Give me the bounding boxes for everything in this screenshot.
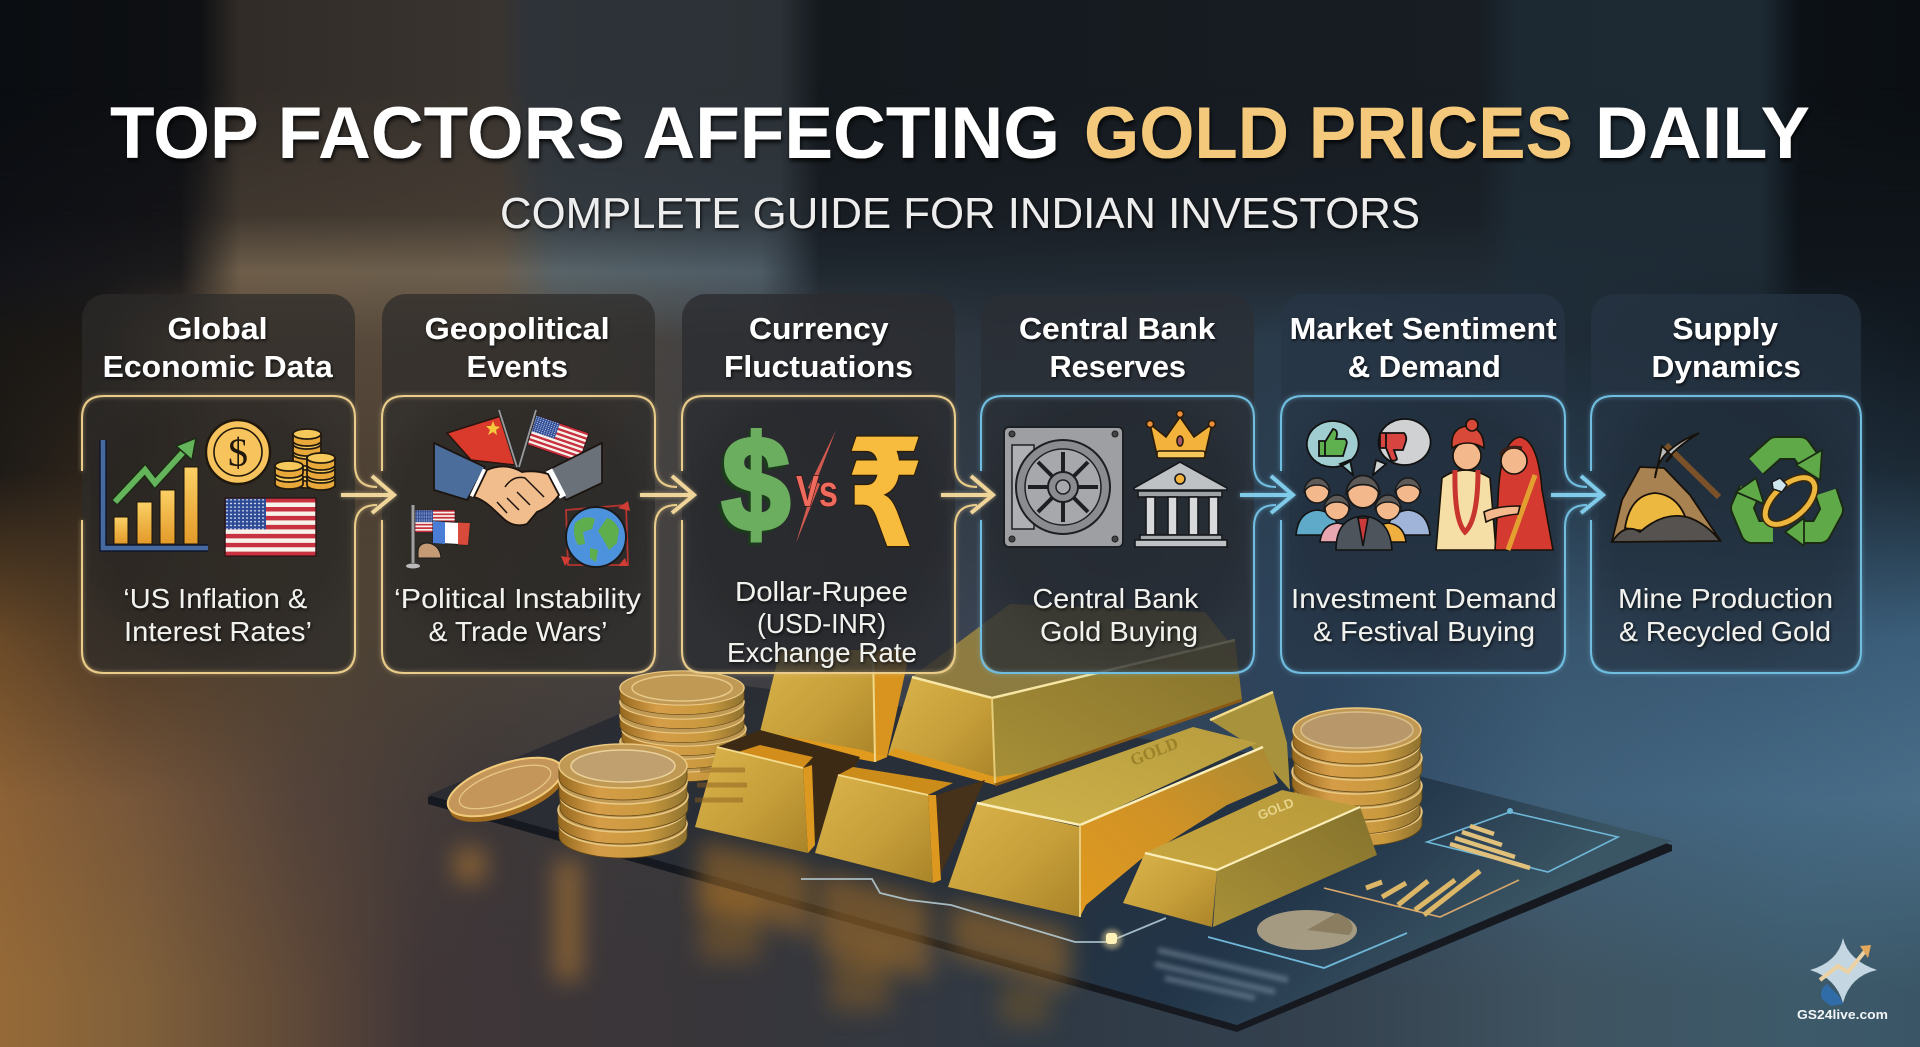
title [110,93,1810,174]
icon: wedding couple [1436,419,1553,550]
description [1291,583,1557,647]
icon: group of people [1296,476,1430,550]
panel: global economic data [82,294,377,673]
panel: geopolitical events [382,294,677,673]
right coin stack [1292,708,1422,846]
table reflections [455,848,1050,1025]
heading: Economic Data [103,349,333,384]
panel: currency fluctuations [682,294,977,673]
icon: dollar coin: $ [228,430,248,475]
panel: central bank reserves [981,294,1276,673]
icon: thumbs down bubble [1373,419,1431,475]
icon: versus mark: Vs [796,467,838,516]
tablet chart panel: bars [1427,808,1618,872]
tablet trend line [801,879,1166,949]
description: Exchange Rate [727,637,917,668]
gold bar front large: GOLD [1127,733,1181,770]
gold bar lower middle [815,767,985,883]
icon: handshake [434,443,602,525]
heading: Supply [1672,311,1779,346]
title: GOLD PRICES [1084,93,1573,174]
description: ‘Political Instability [394,583,641,614]
icon: China and US flags [447,410,589,467]
title: DAILY [1595,93,1810,174]
back coin stack [620,671,746,782]
gold bar back right [1210,692,1290,790]
gold bar front small: GOLD [1256,795,1296,823]
leaning coin [441,746,571,834]
heading [103,311,333,384]
description: ‘US Inflation & [123,583,308,614]
description: Investment Demand [1291,583,1557,614]
icon: thumbs up bubble [1307,421,1359,475]
panel: market sentiment and demand [1281,294,1587,673]
tablet chart panel: pie [1208,910,1407,968]
icon: recycling arrows with ring [1736,448,1832,546]
heading: Central Bank [1019,311,1216,346]
description: Interest Rates’ [124,616,312,647]
icon: rising bar chart [103,438,208,548]
icon: dollar coin [206,420,270,484]
gold bar front small [1123,790,1377,927]
heading [425,311,610,384]
description [394,583,641,647]
description: Dollar-Rupee [735,576,908,607]
gold bar back left [758,650,910,762]
arrow 1 [341,476,394,513]
icon: versus mark [796,430,838,543]
icon: crown [1146,410,1216,458]
description: (USD-INR) [757,608,886,639]
arrow 4 [1240,476,1293,513]
description: Gold Buying [1040,616,1198,647]
heading: Market Sentiment [1290,311,1557,346]
icon: globe [561,501,630,567]
heading: Events [466,349,568,384]
description [1618,583,1833,647]
heading: Currency [749,311,889,346]
logo: GS24live.com [1797,938,1888,1022]
heading: Dynamics [1652,349,1801,384]
heading: Fluctuations [724,349,913,384]
panel: supply dynamics [1591,294,1861,673]
description: & Trade Wars’ [428,616,608,647]
description [1032,583,1200,647]
description: & Festival Buying [1313,616,1535,647]
description [123,583,312,647]
tablet chart panel: columns [1324,871,1519,917]
front left coin stack [558,744,688,858]
arrow 3 [941,476,993,513]
heading: Reserves [1050,349,1186,384]
heading [1019,311,1216,384]
arrow 5 [1551,476,1603,513]
icon: small flags [406,505,470,568]
description [727,576,917,668]
gold bar front large [948,727,1278,917]
heading [1652,311,1801,384]
title: TOP FACTORS AFFECTING [110,93,1060,174]
gold bars and coins on a data tablet [428,604,1672,1032]
icon: dollar sign: $ [722,410,790,559]
icon: coin stacks [275,429,335,490]
heading [1290,311,1557,384]
description: & Recycled Gold [1619,616,1831,647]
icon: US flag [225,498,316,556]
gold bar top large [888,604,1242,785]
arrow 2 [640,476,694,513]
heading [724,311,913,384]
heading: Geopolitical [425,311,610,346]
description: Central Bank [1032,583,1200,614]
description: Mine Production [1618,583,1833,614]
tablet [428,680,1672,1032]
icon: vault [1004,427,1123,547]
icon: rupee sign: ₹ [846,408,924,582]
icon: mine and pickaxe [1612,433,1720,542]
gold bar lower left [695,730,860,853]
logo: GS24live.com: GS24live.com [1797,1007,1888,1022]
heading: Global [168,311,268,346]
subtitle: COMPLETE GUIDE FOR INDIAN INVESTORS [500,189,1420,238]
heading: & Demand [1348,349,1501,384]
icon: bank building [1134,462,1227,547]
